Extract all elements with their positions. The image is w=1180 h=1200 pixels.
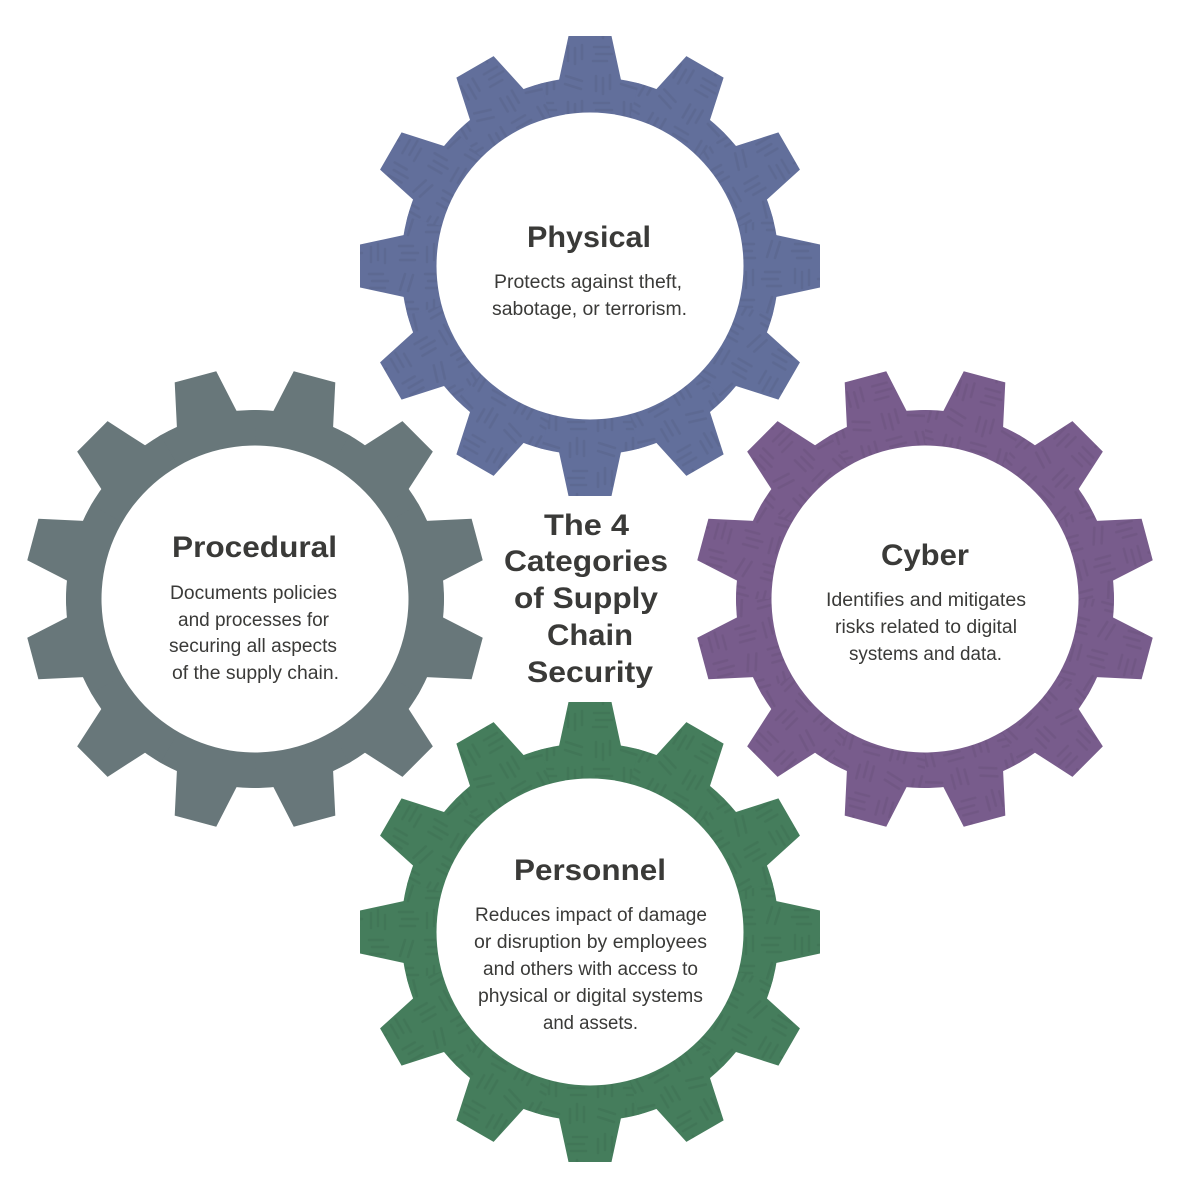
heading: personnel: Personnel — [514, 854, 666, 887]
text: procedural description: and processes for — [178, 610, 330, 631]
panel: cyber gear — [643, 317, 1180, 881]
text: personnel description: physical or digital systems — [478, 986, 703, 1007]
panel: procedural gear — [0, 317, 537, 881]
text: cyber description: risks related to digital — [835, 617, 1017, 638]
text: cyber description: systems and data. — [849, 644, 1002, 665]
text: personnel description: or disruption by employees — [474, 932, 707, 953]
heading: procedural: Procedural — [172, 531, 337, 564]
text: personnel description: Reduces impact of damage — [475, 905, 707, 926]
title — [504, 509, 668, 689]
panel: physical gear — [360, 36, 820, 496]
text: procedural description: Documents policies — [170, 583, 337, 604]
title: Categories — [504, 545, 668, 578]
text: personnel description: and assets. — [543, 1013, 638, 1034]
text: cyber description — [826, 590, 1026, 665]
text: physical description: Protects against theft, — [494, 272, 682, 293]
text: physical description: sabotage, or terrorism. — [492, 299, 687, 320]
title: of Supply — [514, 582, 658, 615]
icon: personnel gear shape — [360, 702, 820, 1162]
title: Chain — [547, 619, 633, 652]
text: personnel description — [474, 905, 707, 1034]
title: The 4 — [544, 509, 629, 542]
text: procedural description — [169, 583, 339, 684]
text: cyber description: Identifies and mitigates — [826, 590, 1026, 611]
text: physical description — [492, 272, 687, 320]
text: procedural description: of the supply chain. — [172, 663, 339, 684]
heading: cyber: Cyber — [881, 539, 969, 572]
heading: physical: Physical — [527, 221, 651, 254]
text: procedural description: securing all aspects — [169, 636, 337, 657]
icon: physical gear shape — [360, 36, 820, 496]
title: Security — [527, 656, 653, 689]
icon: cyber gear shape — [643, 317, 1180, 881]
text: personnel description: and others with access to — [483, 959, 698, 980]
icon: procedural gear shape — [0, 317, 537, 881]
panel: personnel gear — [360, 702, 820, 1162]
